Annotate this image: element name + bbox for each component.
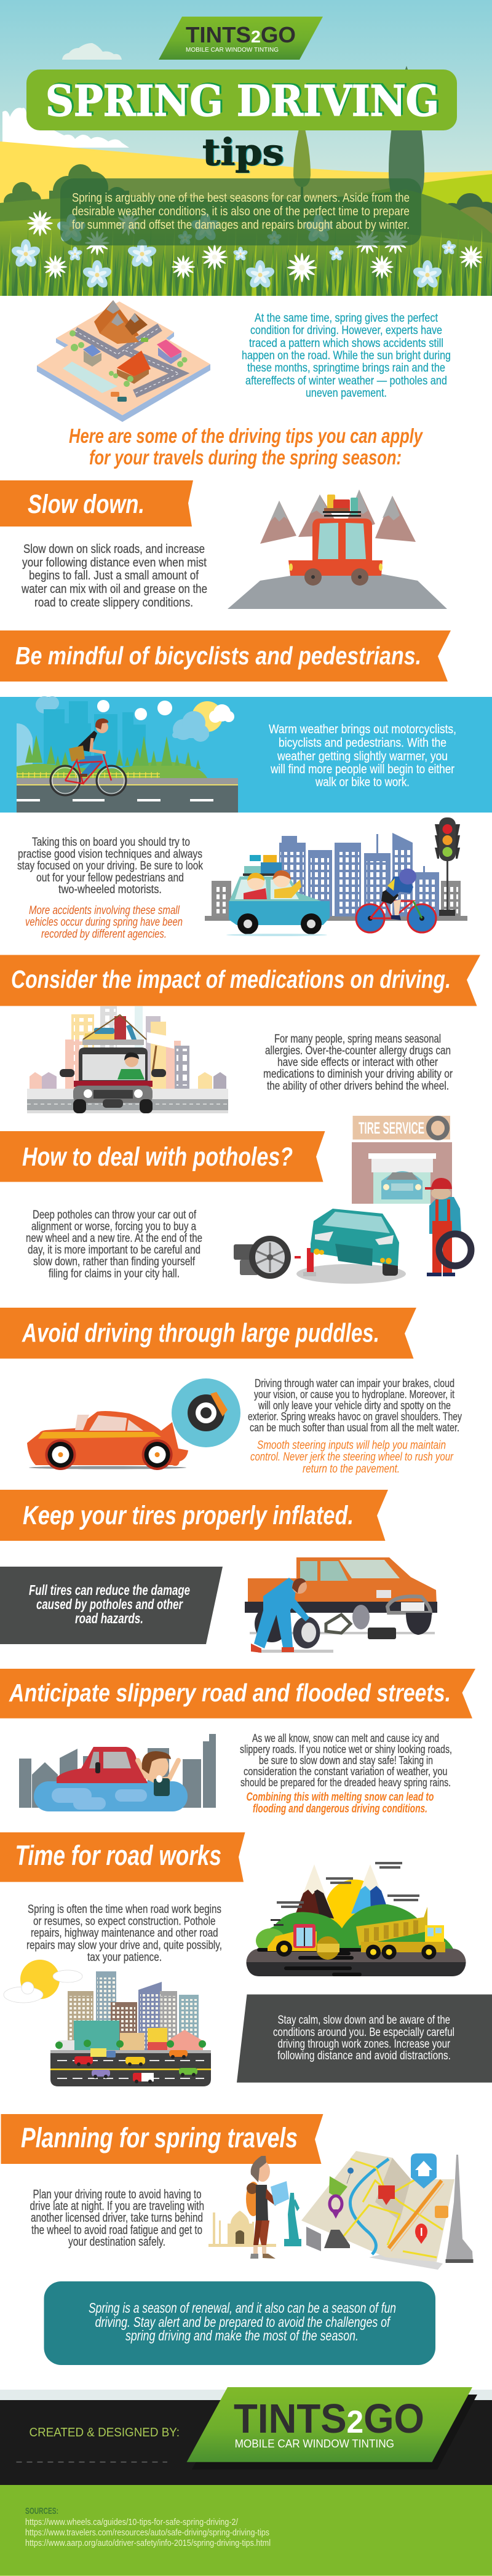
tire shop sign	[353, 1116, 450, 1140]
logo top	[159, 17, 323, 60]
intro box	[60, 178, 421, 245]
title banner: SPRING DRIVING	[46, 77, 439, 126]
callout: full tires: Full tires can reduce the damage	[29, 1582, 190, 1598]
large white cloud	[2, 108, 129, 148]
park trees	[25, 735, 200, 769]
text: road work	[26, 1903, 222, 1964]
footer credits band	[0, 2387, 492, 2485]
intro box: desirable weather conditions, it is also one of the perfect time to prepare	[72, 205, 410, 218]
callout: stay calm: Stay calm, slow down and be aware of the	[278, 2014, 450, 2027]
pool	[63, 362, 117, 393]
banner: planning	[1, 2114, 323, 2164]
text: road work: Spring is often the time when road work begins	[28, 1903, 221, 1916]
banner: potholes: How to deal with potholes?	[22, 1142, 293, 1172]
logo footer	[187, 2387, 472, 2462]
banner: bicyclists	[0, 630, 451, 682]
bushes left	[4, 164, 129, 210]
text: potholes: day, it is more important to be careful and	[28, 1244, 200, 1257]
illustration: traveller and map	[208, 2151, 474, 2270]
subtitle tips: tips	[202, 131, 284, 174]
toy cars	[111, 338, 148, 402]
callout: accidents	[25, 904, 183, 941]
banner: planning: Planning for spring travels	[21, 2122, 298, 2153]
text: allergies: the ability of other drivers behind the wheel.	[267, 1080, 449, 1092]
text: plan route: your destination safely.	[68, 2235, 165, 2249]
text: allergies	[263, 1033, 453, 1092]
text: melting snow	[240, 1732, 452, 1789]
cyclist with helmet	[356, 869, 436, 932]
text: allergies: medications to diminish your driving ability or	[263, 1068, 453, 1081]
isometric town illustration	[37, 300, 210, 422]
illustration: orange car with brake	[27, 1378, 240, 1470]
intro paragraph teal: At the same time, spring gives the perfect	[255, 311, 438, 325]
callout: flooding	[246, 1791, 434, 1816]
logo footer: MOBILE CAR WINDOW TINTING	[235, 2438, 394, 2450]
houses	[83, 340, 182, 384]
grass	[0, 213, 492, 296]
callout: stay calm: driving through work zones. Increase your	[278, 2038, 451, 2051]
text: warm weather: weather getting slightly warmer, you	[277, 749, 448, 763]
callout: stay calm: following distance and avoid distractions.	[277, 2049, 451, 2062]
closing box: driving. Stay alert and be prepared to avoid the challenges of	[95, 2314, 391, 2330]
mechanic blue	[251, 1578, 309, 1653]
logo footer: TINTS2GO	[234, 2396, 424, 2442]
text: allergies: allergies. Over-the-counter allergy drugs can	[265, 1044, 451, 1057]
intro paragraph teal: aftereffects of winter weather — potholes and	[245, 374, 447, 388]
heading orange: for your travels during the spring season:	[89, 446, 402, 469]
text: slow down	[21, 542, 207, 610]
callout: steering: return to the pavement.	[303, 1463, 400, 1476]
mountains	[94, 300, 148, 344]
text: road work: or resumes, so expect construction. Pothole	[33, 1915, 215, 1928]
text: allergies: have side effects or interact with other	[277, 1056, 438, 1069]
closing box: spring driving and make the most of the season.	[125, 2328, 359, 2343]
subtitle tips: tips	[204, 132, 285, 175]
skyline	[44, 701, 146, 769]
text: slow down: your following distance even when mist	[22, 555, 207, 570]
text: slow down: begins to fall. Just a small amount of	[29, 568, 199, 582]
text: plan route: Plan your driving route to avoid having to	[33, 2188, 202, 2201]
panel: cyclist blue	[0, 696, 492, 813]
text: warm weather: Warm weather brings out motorcyclists,	[269, 722, 456, 736]
tree slim	[293, 117, 311, 203]
trees	[69, 330, 187, 387]
bushes right	[424, 193, 492, 246]
banner: tires: Keep your tires properly inflated.	[23, 1501, 354, 1530]
traffic light	[435, 817, 460, 916]
small cars	[74, 2048, 197, 2083]
callout: accidents: More accidents involving these small	[29, 904, 180, 917]
tire shop sign: TIRE SERVICE	[359, 1119, 424, 1137]
intro paragraph teal: happen on the road. While the sun bright during	[242, 349, 451, 362]
text: potholes: alignment or worse, forcing you to buy a	[31, 1220, 196, 1233]
banner: slow down: Slow down.	[28, 490, 145, 519]
text: slow down: road to create slippery conditions.	[34, 595, 193, 610]
text: plan route: drive late at night. If you are traveling with	[30, 2200, 204, 2213]
banner: potholes	[0, 1131, 325, 1182]
banner: flooded streets	[0, 1669, 475, 1719]
text: melting snow: be sure to slow down and stay safe! Taking in	[259, 1754, 433, 1767]
mechanic	[425, 1178, 471, 1276]
spare tire and wheel	[234, 1236, 291, 1279]
closing box	[44, 2281, 435, 2365]
intro box: Spring is arguably one of the best seasons for car owners. Aside from the	[72, 191, 410, 205]
family car	[226, 855, 330, 936]
banner: tires	[0, 1490, 388, 1541]
tire stack and jack	[326, 1615, 396, 1639]
text: potholes: slow down, rather than finding yourself	[33, 1255, 196, 1268]
text: vision techniques: practise good vision techniques and always	[18, 848, 202, 861]
banner: puddles	[0, 1308, 416, 1359]
logo top: MOBILE CAR WINDOW TINTING	[186, 47, 279, 54]
jacked teal car	[295, 1209, 406, 1284]
hero panel	[0, 0, 492, 296]
intro paragraph teal: these months, springtime brings rain and the	[247, 361, 445, 375]
fence	[17, 774, 160, 777]
text: vision techniques: two-wheeled motorists.	[58, 883, 162, 896]
callout: steering	[250, 1439, 454, 1476]
text: slow down: Slow down on slick roads, and increase	[23, 542, 205, 556]
intro paragraph teal: uneven pavement.	[306, 386, 387, 400]
illustration: city traffic	[205, 817, 467, 936]
text: vision techniques	[17, 836, 203, 896]
sun and clouds	[4, 1960, 82, 2003]
intro paragraph teal: condition for driving. However, experts have	[250, 324, 442, 337]
intro box: for summer and offset the damages and repairs brought about by winter.	[72, 218, 410, 232]
closing box: Spring is a season of renewal, and it also can be a season of fun	[89, 2300, 396, 2316]
sun and clouds	[36, 696, 234, 742]
text: plan route: another licensed driver, take turns behind	[31, 2211, 203, 2225]
banner: slow down	[0, 480, 193, 527]
text: road work: repairs may slow your drive and, quite possibly,	[26, 1939, 222, 1952]
illustration: pickup and man changing tire	[245, 1557, 437, 1653]
cyclist	[50, 718, 126, 795]
yellow hill	[0, 141, 492, 258]
illustration: tire service	[234, 1116, 471, 1284]
text: warm weather: walk or bike to work.	[315, 775, 410, 789]
road	[17, 778, 238, 813]
meadow	[0, 189, 492, 296]
tree tall	[389, 66, 424, 209]
intro paragraph teal	[242, 311, 451, 400]
text: vision techniques: out for your fellow pedestrians and	[36, 872, 184, 885]
small cloud	[62, 43, 122, 60]
dump truck	[356, 1907, 445, 1960]
illustration: construction vehicles	[246, 1862, 466, 1976]
banner: road works: Time for road works	[15, 1840, 221, 1871]
text: allergies: For many people, spring means seasonal	[274, 1033, 441, 1046]
text: warm weather: bicyclists and pedestrians. With the	[279, 736, 446, 750]
brake disc badge	[172, 1378, 240, 1447]
callout: stay calm	[237, 1994, 492, 2083]
banner: puddles: Avoid driving through large puddles.	[22, 1319, 379, 1348]
heading orange	[69, 424, 423, 469]
text: water	[248, 1377, 462, 1434]
text: slow down: water can mix with oil and grease on the	[21, 582, 207, 596]
landmarks	[208, 2155, 474, 2263]
text: melting snow: As we all know, snow can melt and cause icy and	[252, 1732, 439, 1744]
logo top: TINTS2GO	[186, 22, 296, 47]
banner: road works	[0, 1832, 245, 1882]
sources panel: SOURCES:	[25, 2506, 58, 2516]
map pins	[330, 2153, 448, 2244]
callout: accidents: vehicles occur during spring have been	[25, 916, 183, 929]
text: potholes: Deep potholes can throw your car out of	[33, 1209, 197, 1222]
illustration: flooded car	[19, 1734, 216, 1811]
traveller	[246, 2156, 289, 2259]
text: road work: tax your patience.	[87, 1951, 162, 1964]
text: potholes: filing for claims in your city hall.	[49, 1267, 180, 1281]
illustration: busy city road	[4, 1960, 211, 2086]
illustration: truck driver in city	[27, 1006, 228, 1113]
intro paragraph teal: traced a pattern which shows accidents still	[249, 336, 443, 350]
callout: full tires: road hazards.	[75, 1610, 143, 1626]
text: road work: repairs, highway maintenance and other road	[31, 1927, 218, 1940]
footer credits band: CREATED & DESIGNED BY:	[30, 2426, 180, 2439]
green hill right	[320, 174, 492, 258]
map	[301, 2151, 454, 2270]
man waving	[138, 1751, 178, 1796]
title banner: SPRING DRIVING	[47, 76, 441, 125]
callout: accidents: recorded by different agencies.	[41, 928, 167, 941]
callout: full tires: caused by potholes and other	[36, 1596, 183, 1612]
text: potholes: new wheel and a new tire. At the end of the	[26, 1232, 202, 1245]
text: plan route	[30, 2188, 204, 2249]
sources panel	[0, 2485, 492, 2576]
sources panel: https://www.wheels.ca/guides/10-tips-for-safe-spring-driving-2/	[25, 2517, 239, 2527]
banner: medications	[0, 955, 480, 1006]
callout: full tires	[0, 1567, 223, 1644]
flowers	[10, 210, 483, 290]
text: melting snow: consideration the constant variation of weather, you	[244, 1765, 448, 1778]
illustration: car on hill	[228, 490, 447, 609]
text: vision techniques: stay focused on your driving. Be sure to look	[17, 860, 203, 872]
sources panel: https://www.travelers.com/resources/auto/safe-driving/spring-driving-tips	[25, 2527, 269, 2538]
text: warm weather: will find more people will begin to either	[270, 762, 454, 776]
park hill	[17, 761, 207, 778]
text: plan route: the wheel to avoid road fatigue and get to	[31, 2224, 202, 2237]
text: warm weather	[269, 722, 456, 789]
text: vision techniques: Taking this on board you should try to	[32, 836, 190, 849]
banner: bicyclists: Be mindful of bicyclists and pedestrians.	[15, 642, 421, 670]
sources panel: https://www.aarp.org/auto/driver-safety/info-2015/spring-driving-tips.html	[25, 2538, 271, 2548]
callout: flooding: flooding and dangerous driving conditions.	[253, 1803, 427, 1816]
road roller	[268, 1919, 339, 1960]
text: potholes	[26, 1209, 202, 1281]
callout: steering: Smooth steering inputs will help you maintain	[257, 1439, 446, 1452]
